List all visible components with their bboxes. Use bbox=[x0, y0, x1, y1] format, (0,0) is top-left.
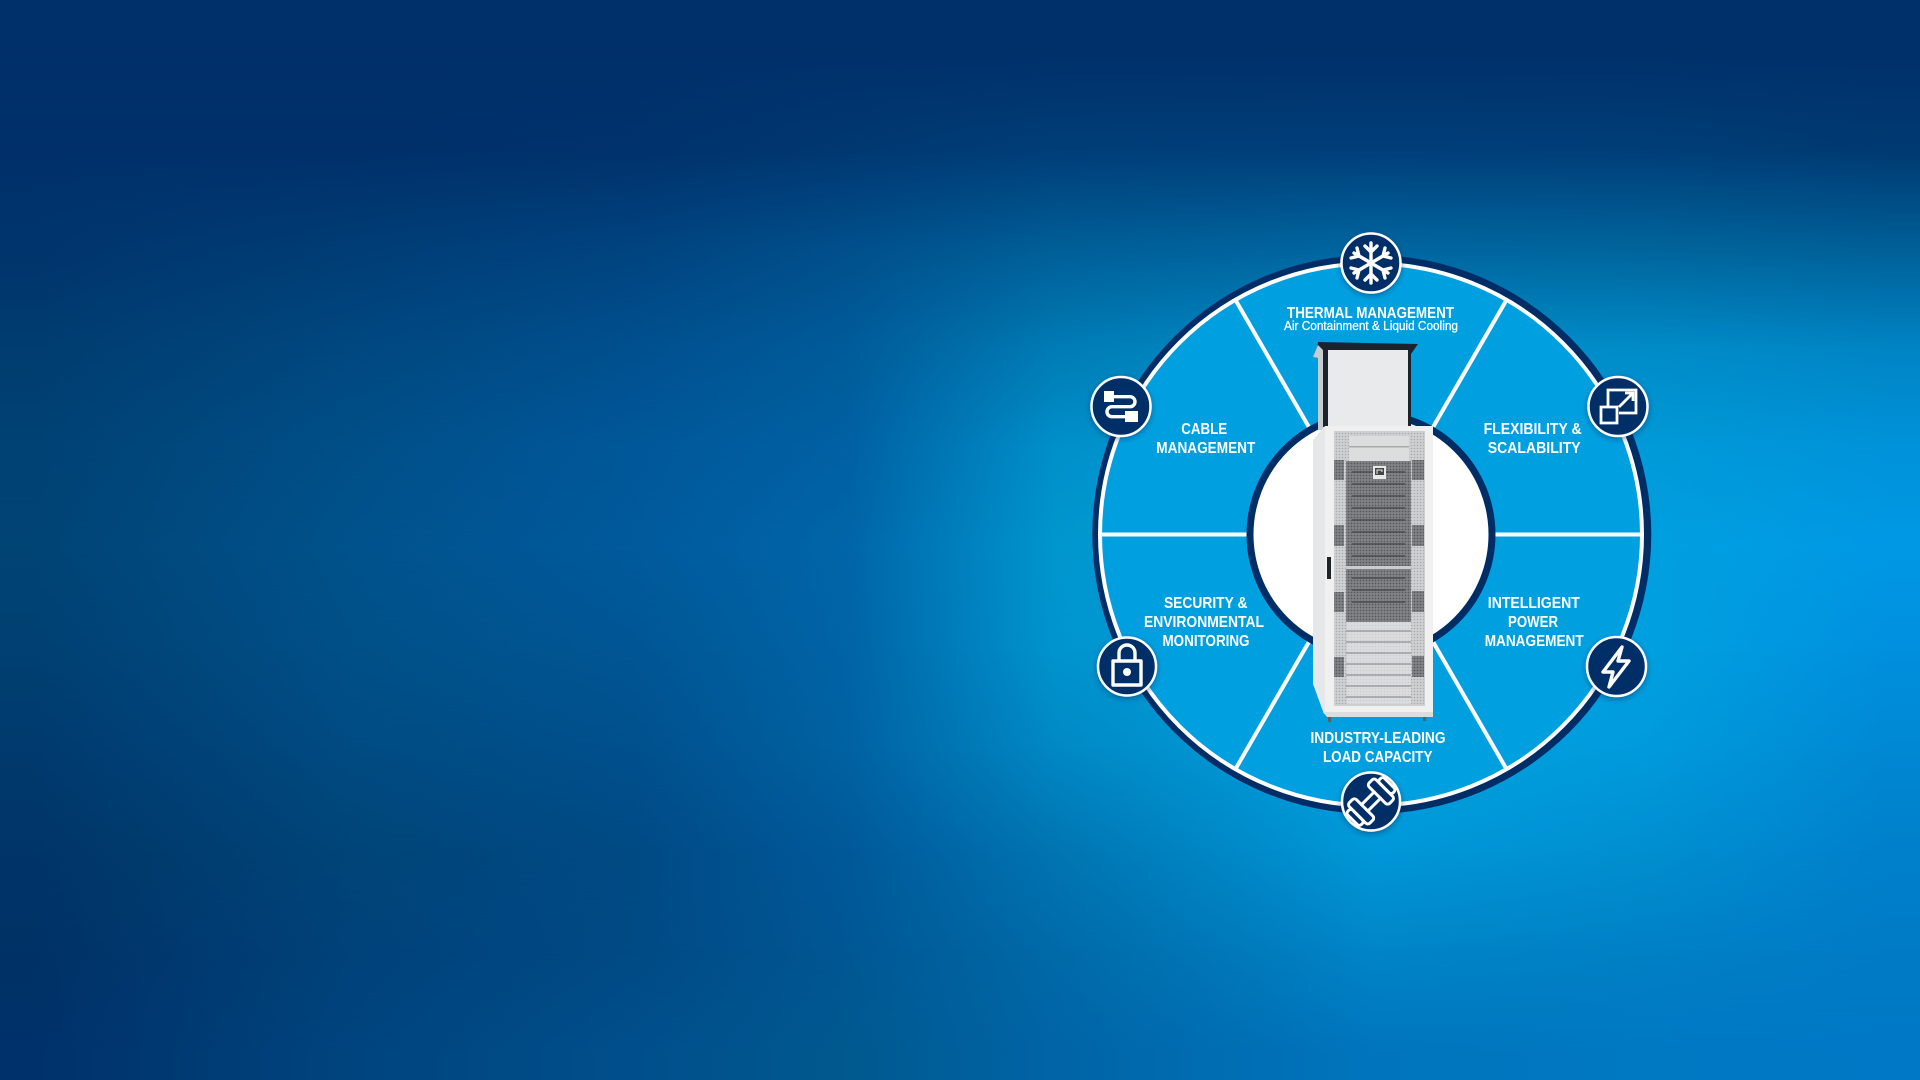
icon: lightning bolt bbox=[1587, 637, 1646, 696]
rack logo badge bbox=[1373, 466, 1386, 479]
center hub circle bbox=[1250, 414, 1492, 656]
heading: industry-leading load capacity bbox=[1310, 730, 1446, 766]
door handle bbox=[1327, 557, 1331, 579]
heading: cable management: MANAGEMENT bbox=[1156, 440, 1256, 457]
rack side panel bbox=[1313, 426, 1325, 714]
heading: thermal management bbox=[1284, 305, 1458, 333]
heading: intelligent power management: MANAGEMENT bbox=[1485, 633, 1584, 650]
heading: security and environmental monitoring: MONITORING bbox=[1162, 633, 1250, 650]
heading: flexibility and scalability: FLEXIBILITY & bbox=[1484, 421, 1582, 438]
server rack bbox=[1313, 342, 1433, 722]
heading: thermal management: Air Containment & Liquid Cooling bbox=[1284, 319, 1458, 333]
heading: security and environmental monitoring bbox=[1144, 595, 1264, 650]
heading: cable management bbox=[1156, 421, 1256, 457]
heading: intelligent power management bbox=[1485, 595, 1584, 650]
heading: intelligent power management: POWER bbox=[1508, 614, 1558, 631]
heading: intelligent power management: INTELLIGENT bbox=[1488, 595, 1580, 612]
icon: padlock bbox=[1098, 638, 1156, 696]
rack chimney bbox=[1313, 342, 1418, 430]
heading: cable management: CABLE bbox=[1181, 421, 1227, 438]
heading: security and environmental monitoring: ENVIRONMENTAL bbox=[1144, 614, 1264, 631]
heading: industry-leading load capacity: LOAD CAPACITY bbox=[1323, 749, 1433, 766]
icon: snowflake bbox=[1342, 234, 1400, 292]
icon: dumbbell bbox=[1342, 772, 1400, 830]
rack mesh door bbox=[1334, 431, 1425, 706]
wheel disc bbox=[1092, 255, 1651, 814]
icon: cable bbox=[1092, 377, 1150, 436]
heading: security and environmental monitoring: SECURITY & bbox=[1164, 595, 1247, 612]
icon: expand arrow bbox=[1588, 377, 1648, 436]
rack door frame bbox=[1325, 426, 1433, 714]
heading: flexibility and scalability bbox=[1484, 421, 1582, 457]
rack feet bbox=[1328, 712, 1426, 722]
heading: thermal management: THERMAL MANAGEMENT bbox=[1287, 305, 1454, 322]
heading: industry-leading load capacity: INDUSTRY-LEADING bbox=[1310, 730, 1446, 747]
heading: flexibility and scalability: SCALABILITY bbox=[1488, 440, 1581, 457]
